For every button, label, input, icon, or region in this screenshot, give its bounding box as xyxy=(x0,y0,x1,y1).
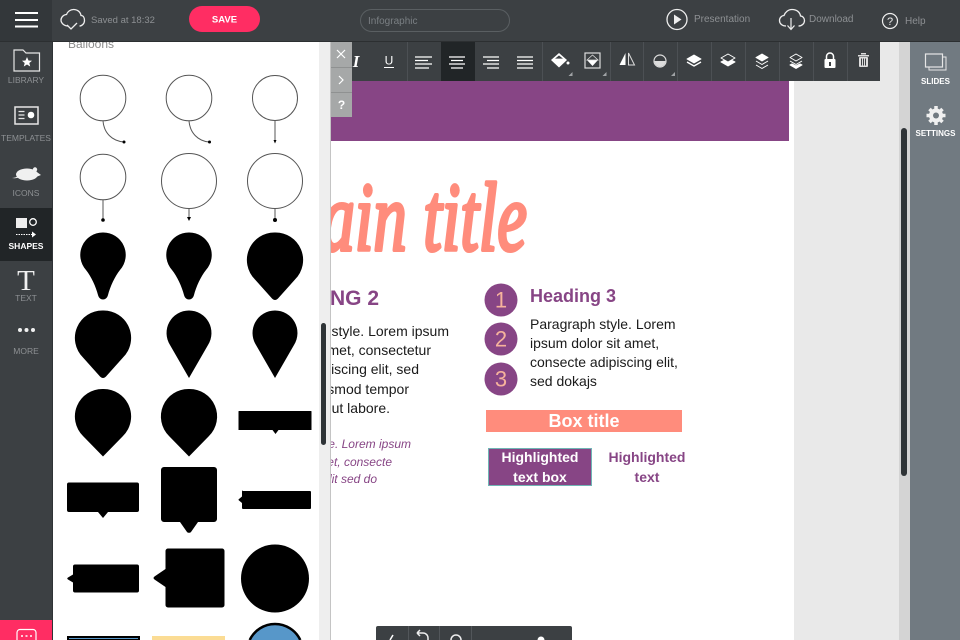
flip icon xyxy=(620,53,634,65)
help: Help xyxy=(905,16,926,27)
floating side buttons: ? xyxy=(338,98,345,112)
left sidebar xyxy=(0,41,53,640)
menu button xyxy=(0,0,52,41)
canvas workspace background xyxy=(330,41,910,640)
highlighted text box xyxy=(488,448,592,486)
italic paragraph: dolor sit amet, consecte xyxy=(265,455,392,469)
paragraph column: incididunt ut labore. xyxy=(269,400,390,416)
speech bubble shapes xyxy=(67,411,312,612)
numbered circles: 1 xyxy=(495,288,507,312)
box title xyxy=(486,410,682,432)
main title: Main title xyxy=(265,163,527,272)
download: Download xyxy=(809,14,853,25)
download xyxy=(780,10,853,30)
section title: Balloons xyxy=(68,37,114,51)
library item xyxy=(8,50,44,85)
more item xyxy=(13,328,39,356)
italic paragraph xyxy=(331,439,410,483)
bottom navigation toolbar xyxy=(376,626,572,640)
templates item: TEMPLATES xyxy=(1,133,51,143)
numbered circles xyxy=(484,284,518,396)
align icons xyxy=(415,57,533,68)
highlighted text box: Highlighted xyxy=(502,449,578,465)
saved status: Saved at 18:32 xyxy=(91,15,155,26)
save button: SAVE xyxy=(212,14,237,26)
paragraph column: dolor sit amet, consectetur xyxy=(267,342,431,358)
purple banner xyxy=(331,81,789,141)
settings item xyxy=(915,106,956,138)
more item: MORE xyxy=(13,346,39,356)
save button xyxy=(189,6,260,32)
highlighted text: text xyxy=(635,469,660,485)
paragraph 3 xyxy=(530,316,678,389)
presentation xyxy=(667,10,750,30)
slides item: SLIDES xyxy=(921,77,951,86)
document name field: Infographic xyxy=(368,16,417,27)
map pin shapes xyxy=(75,232,303,456)
lock icon xyxy=(824,53,836,68)
coloured shapes row xyxy=(68,624,300,640)
templates item xyxy=(1,107,51,143)
paragraph 3: sed dokajs xyxy=(530,373,597,389)
presentation: Presentation xyxy=(694,14,750,25)
paragraph column xyxy=(331,326,448,413)
highlighted text xyxy=(609,452,684,482)
highlighted text: Highlighted xyxy=(608,449,686,465)
top bar xyxy=(0,0,960,42)
floating side buttons xyxy=(331,42,352,117)
icons item: ICONS xyxy=(13,188,40,198)
italic and underline: U xyxy=(385,54,393,68)
settings item: SETTINGS xyxy=(915,129,956,138)
fill and image fill icons xyxy=(551,53,675,76)
help: ? xyxy=(887,16,893,28)
box title: Box title xyxy=(548,411,620,431)
right sidebar xyxy=(910,42,960,640)
shapes item active xyxy=(0,208,52,261)
layer icons xyxy=(687,54,802,68)
numbered circles: 2 xyxy=(495,326,507,352)
italic and underline: I xyxy=(352,52,361,71)
opacity drop icon xyxy=(654,55,666,67)
text item: TEXT xyxy=(15,293,37,303)
highlighted text box: text box xyxy=(513,469,567,485)
italic paragraph: Italic style. Lorem ipsum xyxy=(282,437,411,451)
paragraph column: Paragraph style. Lorem ipsum xyxy=(262,323,449,339)
balloon tail ends xyxy=(101,140,277,222)
slides item xyxy=(921,54,951,86)
numbered circles: 3 xyxy=(495,366,507,392)
saved status xyxy=(61,10,155,29)
chat button xyxy=(0,620,52,640)
canvas: infographic template xyxy=(331,81,789,486)
italic and underline xyxy=(352,52,394,71)
trash icon xyxy=(858,53,869,67)
heading 3: Heading 3 xyxy=(530,286,616,306)
paragraph column: adipiscing elit, sed xyxy=(305,361,419,377)
help xyxy=(882,14,926,28)
library item: LIBRARY xyxy=(8,75,44,85)
balloon outlines with tails xyxy=(80,75,302,220)
paragraph 3: Paragraph style. Lorem xyxy=(530,316,676,332)
icons item xyxy=(12,167,41,198)
paragraph 3: ipsum dolor sit amet, xyxy=(530,335,659,351)
italic paragraph: adipiscing elit sed do xyxy=(266,472,377,486)
shapes library panel xyxy=(52,37,330,640)
document name field xyxy=(360,10,510,32)
text item: T xyxy=(17,265,35,297)
heading 2: HEADING 2 xyxy=(265,287,379,310)
paragraph column: do eiusmod tempor xyxy=(289,381,409,397)
panel scrollbar xyxy=(321,323,326,445)
text format toolbar xyxy=(352,42,880,81)
text item xyxy=(15,265,37,303)
shapes item active: SHAPES xyxy=(9,241,44,251)
paragraph 3: consecte adipiscing elit, xyxy=(530,354,678,370)
